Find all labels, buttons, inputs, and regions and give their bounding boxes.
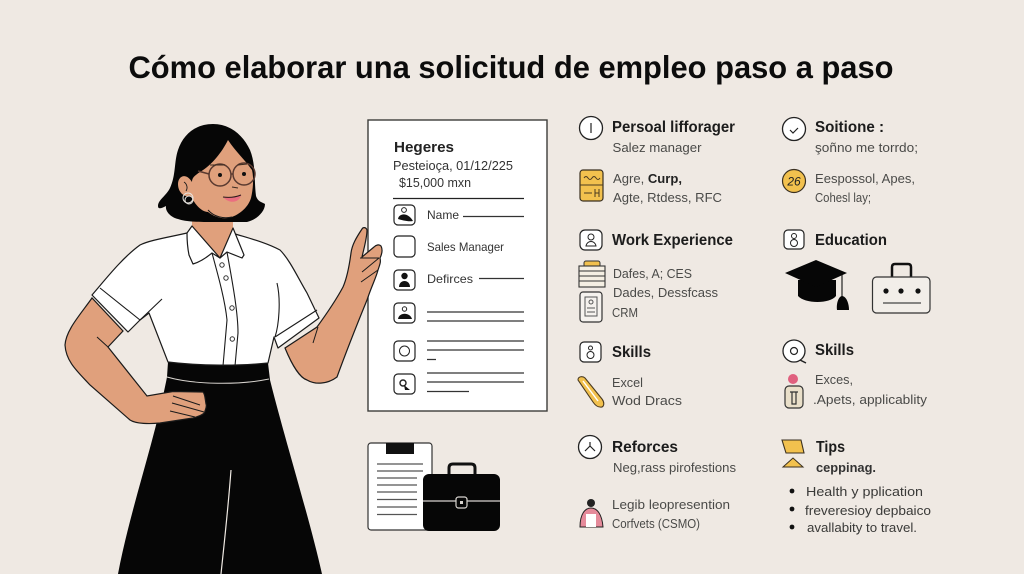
section: education xyxy=(784,230,930,313)
section: tips: Tips xyxy=(816,439,845,456)
icon: id document xyxy=(580,292,602,322)
icon: yellow stack xyxy=(579,261,605,287)
section: solutions: Eespossol, Apes, xyxy=(815,171,915,186)
form rows: Sales Manager xyxy=(427,240,504,254)
section: skills right: .Apets, applicablity xyxy=(813,392,928,407)
section: solutions xyxy=(782,118,918,205)
icon: toolcase xyxy=(872,264,930,313)
left arm and hand xyxy=(65,298,206,424)
section: solutions: Cohesl lay; xyxy=(815,190,871,205)
right arm and hand xyxy=(285,228,382,383)
tips bullet list: freveresioy depbaico xyxy=(805,503,931,518)
section: tips xyxy=(782,439,931,535)
section: references: Corfvets (CSMO) xyxy=(612,516,700,531)
icon: clipboard xyxy=(368,443,432,530)
icon: person badge xyxy=(580,342,601,362)
section: work experience: Work Experience xyxy=(612,232,733,249)
neck xyxy=(192,205,233,258)
section: personal information xyxy=(580,116,735,205)
section: skills left: Excel xyxy=(612,375,643,390)
section: work experience: Dades, Dessfcass xyxy=(613,285,718,300)
icon: yellow card xyxy=(580,170,603,201)
tips bullet list: avallabity to travel. xyxy=(807,520,917,535)
icon: yellow badge: 26 xyxy=(786,174,801,188)
face xyxy=(178,140,253,218)
document: application form: $15,000 mxn xyxy=(399,176,471,190)
section: skills left xyxy=(578,342,683,408)
icon: check circle xyxy=(782,118,806,140)
collar and placket xyxy=(187,226,244,264)
section: references: Neg,rass pirofestions xyxy=(613,460,736,475)
icon: info circle xyxy=(580,116,602,140)
earring xyxy=(183,193,193,204)
section: skills left: Skills xyxy=(612,344,651,361)
form rows: Defirces xyxy=(427,272,473,286)
icon: magnifier xyxy=(783,340,806,363)
section: education: Education xyxy=(815,232,887,249)
form rows: Name xyxy=(427,208,459,222)
icon: briefcase xyxy=(423,464,500,531)
section: skills left: Wod Dracs xyxy=(612,393,683,408)
section: work experience xyxy=(579,230,733,322)
section: work experience: CRM xyxy=(612,305,638,320)
section: personal information: Persoal lifforager xyxy=(612,119,735,136)
section: skills right: Skills xyxy=(815,342,854,359)
illustration: woman presenting the form xyxy=(65,124,382,574)
section: tips: ceppinag. xyxy=(816,460,876,475)
hair xyxy=(158,124,265,222)
section: personal information: Agte, Rtdess, RFC xyxy=(613,190,722,205)
icon: graduation cap xyxy=(785,260,849,310)
icon: yellow pencil xyxy=(578,377,604,407)
section: skills right xyxy=(783,340,928,408)
section: solutions: şoñno me torrdo; xyxy=(815,140,918,155)
glasses xyxy=(198,163,255,186)
tips bullet list xyxy=(790,484,931,535)
section: personal information: Agre, Curp, xyxy=(613,171,682,186)
mouth xyxy=(223,195,241,202)
document: application form xyxy=(368,120,547,411)
title: Cómo elaborar una solicitud de empleo paso a paso xyxy=(128,49,894,85)
section: work experience: Dafes, A; CES xyxy=(613,266,692,281)
section: personal information: Salez manager xyxy=(612,140,702,155)
tips bullet list: Health y pplication xyxy=(806,484,923,499)
document date and salary: Pesteioça, 01/12/225 xyxy=(393,159,513,173)
icon: clock circle xyxy=(578,436,602,458)
section: solutions: Soitione : xyxy=(815,119,884,136)
skirt and belt xyxy=(118,362,322,574)
icon: person badge xyxy=(580,230,602,250)
form rows xyxy=(394,205,524,394)
icon: person badge xyxy=(784,230,804,249)
section: references: Reforces xyxy=(612,439,678,456)
section: references: Legib leopresention xyxy=(612,497,730,512)
shirt xyxy=(92,233,319,365)
section: skills right: Exces, xyxy=(815,372,853,387)
document heading: Hegeres xyxy=(394,139,454,156)
icon: person with pink jacket xyxy=(580,499,603,527)
icon: yellow note xyxy=(782,440,804,467)
section: references xyxy=(578,436,736,531)
icon: bag with pink figure xyxy=(785,374,803,408)
